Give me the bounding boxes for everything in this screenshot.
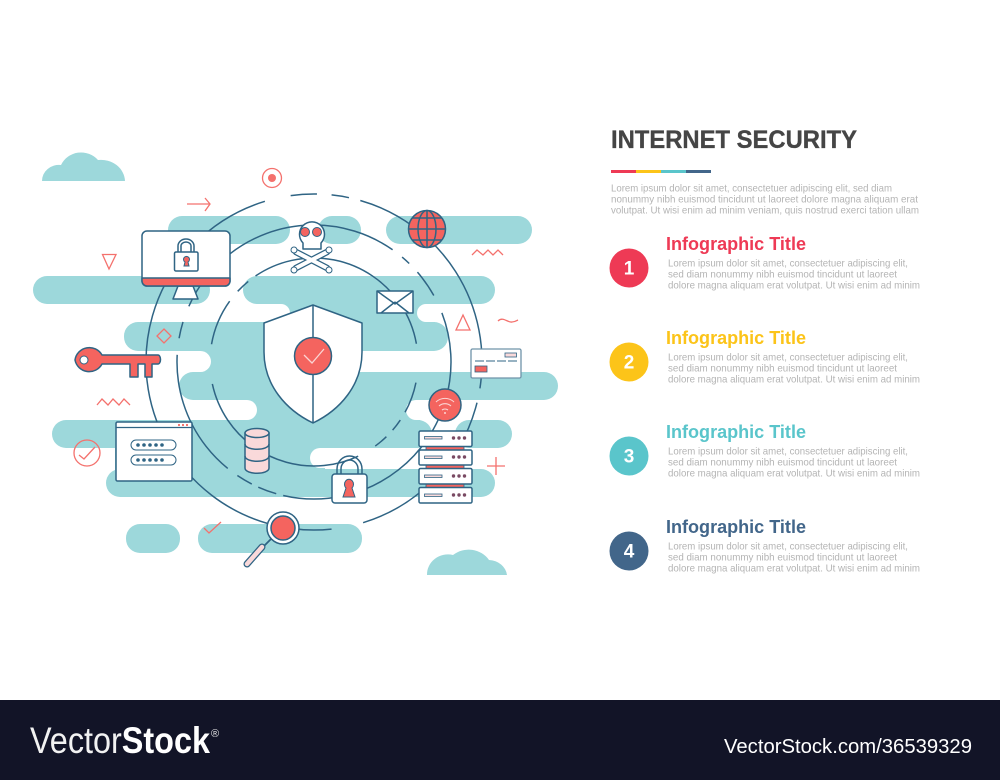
intro paragraph: volutpat. Ut wisi enim ad minim veniam, quis nostrud exerci tation ullam bbox=[611, 204, 919, 216]
heading: INTERNET SECURITY bbox=[611, 126, 857, 154]
item 1: Infographic Title bbox=[666, 234, 806, 254]
cloud left bbox=[42, 152, 125, 181]
icon: database bbox=[245, 428, 269, 473]
item 3: sed diam nonummy nibh euismod tincidunt ut laoreet bbox=[668, 456, 897, 468]
item 2: Lorem ipsum dolor sit amet, consectetuer adipiscing elit, bbox=[668, 352, 908, 364]
icon: padlock bbox=[332, 456, 367, 503]
item 4: dolore magna aliquam erat volutpat. Ut wisi enim ad minim bbox=[668, 562, 920, 574]
item 2: 2 bbox=[624, 352, 634, 374]
intro paragraph: nonummy nibh euismod tincidunt ut laoreet dolore magna aliquam erat bbox=[611, 194, 918, 206]
decorative red marks bbox=[74, 168, 518, 533]
item 3: Lorem ipsum dolor sit amet, consectetuer adipiscing elit, bbox=[668, 446, 908, 458]
footer id: VectorStock.com/36539329 bbox=[724, 736, 972, 758]
icon: wifi badge bbox=[429, 389, 461, 421]
icon: key bbox=[75, 348, 160, 377]
icon: skull and crossbones bbox=[291, 222, 332, 273]
item 4: sed diam nonummy nibh euismod tincidunt ut laoreet bbox=[668, 552, 897, 564]
item 2 bbox=[610, 328, 920, 386]
intro paragraph bbox=[611, 182, 919, 216]
item 1 bbox=[610, 234, 920, 292]
item 2: dolore magna aliquam erat volutpat. Ut wisi enim ad minim bbox=[668, 374, 920, 386]
item 3: 3 bbox=[624, 446, 634, 468]
icon: monitor with padlock bbox=[142, 231, 230, 299]
item 2: sed diam nonummy nibh euismod tincidunt ut laoreet bbox=[668, 362, 897, 374]
registered mark: ® bbox=[211, 728, 219, 740]
item 2: Infographic Title bbox=[666, 328, 806, 348]
teal background shapes bbox=[33, 216, 558, 553]
icon: magnifying glass bbox=[247, 512, 299, 564]
cloud right bbox=[427, 550, 507, 575]
dashed orbit rings bbox=[106, 154, 522, 570]
item 4 bbox=[610, 517, 920, 574]
item 4: 4 bbox=[624, 542, 635, 562]
footer logo: VectorStock bbox=[30, 720, 210, 761]
item 1: Lorem ipsum dolor sit amet, consectetuer adipiscing elit, bbox=[668, 258, 908, 270]
icon: envelope bbox=[377, 291, 413, 313]
item 1: sed diam nonummy nibh euismod tincidunt ut laoreet bbox=[668, 268, 897, 280]
icon: globe bbox=[408, 210, 446, 248]
item 1: dolore magna aliquam erat volutpat. Ut wisi enim ad minim bbox=[668, 280, 920, 292]
icon: login window bbox=[116, 422, 192, 481]
item 4: Infographic Title bbox=[666, 517, 806, 537]
icon: server rack bbox=[419, 431, 472, 503]
icon: shield with check bbox=[264, 305, 362, 423]
colour bar bbox=[611, 170, 711, 173]
intro paragraph: Lorem ipsum dolor sit amet, consectetuer adipiscing elit, sed diam bbox=[611, 182, 892, 194]
item 3: dolore magna aliquam erat volutpat. Ut wisi enim ad minim bbox=[668, 468, 920, 480]
item 4: Lorem ipsum dolor sit amet, consectetuer adipiscing elit, bbox=[668, 540, 908, 552]
item 1: 1 bbox=[624, 258, 635, 280]
icon: credit card bbox=[471, 349, 521, 378]
footer bar bbox=[0, 700, 1000, 780]
item 3 bbox=[610, 422, 920, 480]
item 3: Infographic Title bbox=[666, 422, 806, 442]
